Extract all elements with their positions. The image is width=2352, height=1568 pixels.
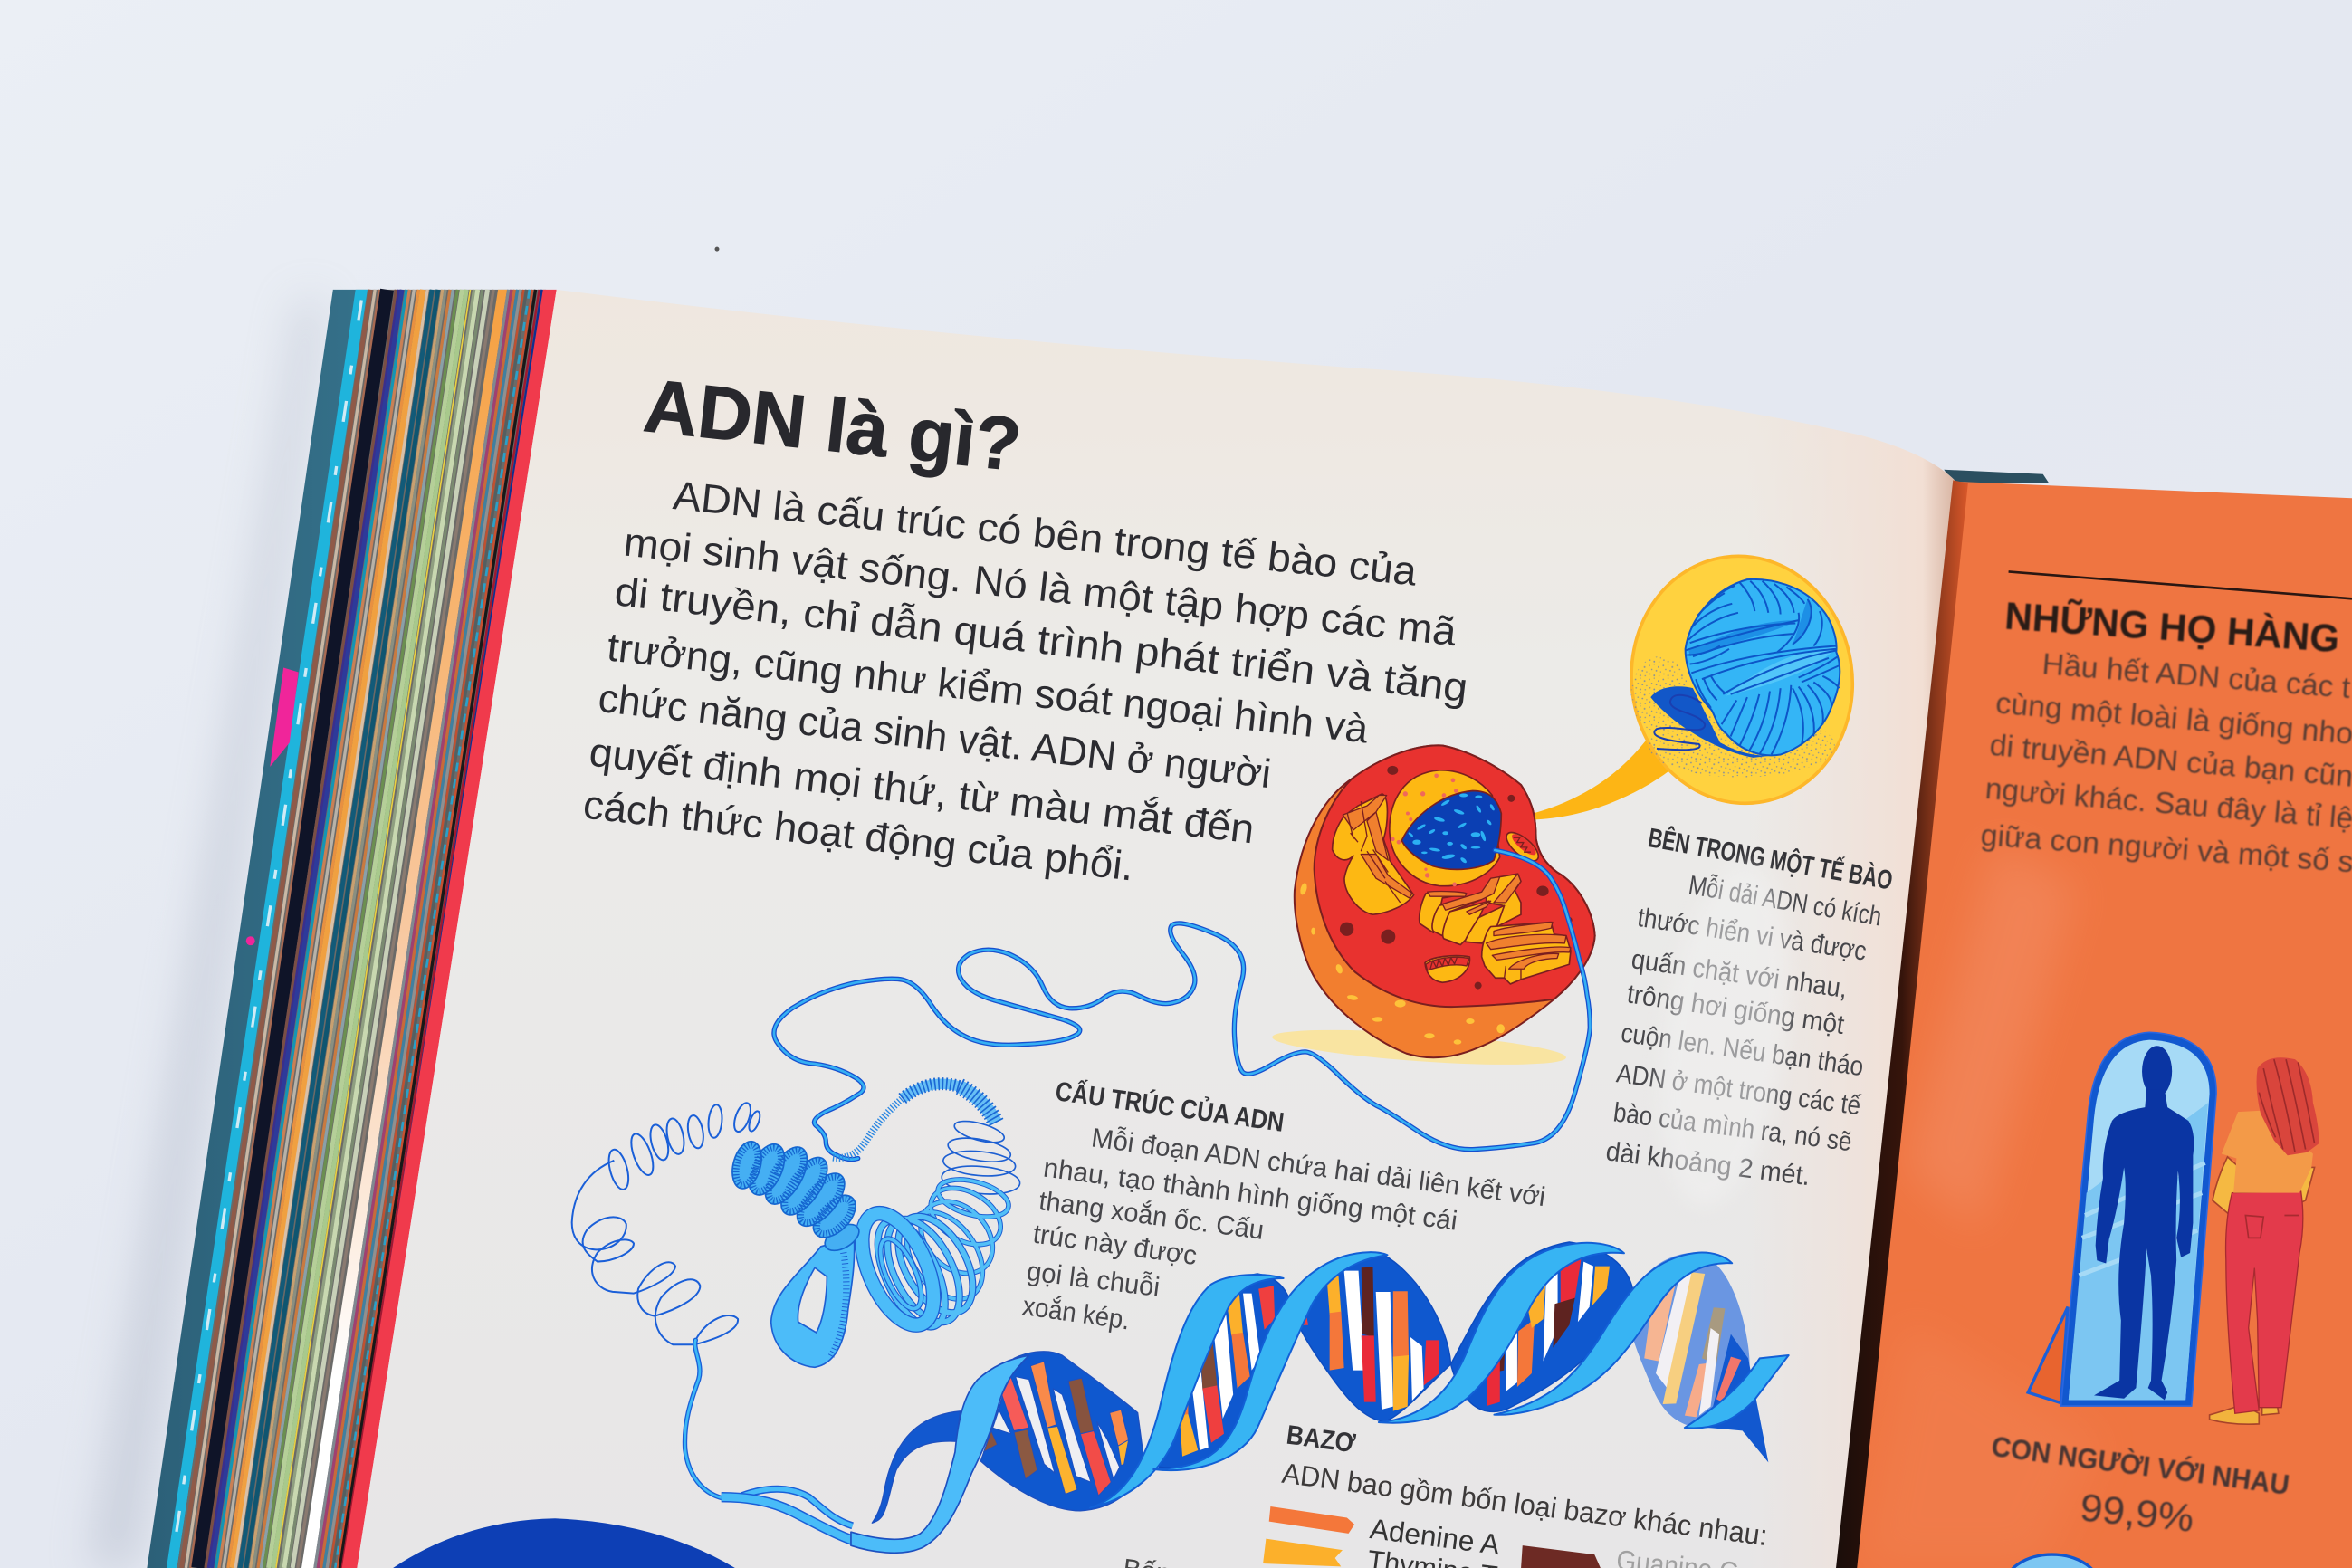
front ribbon one	[851, 1355, 1029, 1553]
icon: yarn ball callout	[1510, 541, 1869, 819]
organelle: centre golgi	[1420, 874, 1521, 945]
panel: book fore-edge with page stripes	[147, 290, 557, 1568]
text block: bases legend	[1121, 1420, 1769, 1568]
organelle: right golgi	[1482, 923, 1571, 984]
text block: relatives intro: Hầu hết ADN của các t	[2041, 647, 2352, 705]
figure: 99.9%: 99,9%	[2078, 1486, 2196, 1541]
illustration: mirror with human silhouette	[2028, 1032, 2216, 1406]
glare over cell caption	[1641, 856, 1809, 1215]
legend: adenine	[1269, 1506, 1502, 1561]
loose thread	[1654, 695, 1705, 750]
text block: structure of DNA: xoắn kép.	[1020, 1291, 1132, 1335]
backing bands	[1155, 1242, 1632, 1468]
heading: structure of DNA: CẤU TRÚC CỦA ADN	[1054, 1076, 1286, 1138]
illustration: unwinding DNA strand	[774, 850, 1590, 1160]
text block: inside a cell: Mỗi dải ADN có kích	[1687, 870, 1884, 932]
cell ground shadow	[1271, 1023, 1567, 1072]
text block: main intro paragraph: mọi sinh vật sống. Nó là một tập hợp các mã	[622, 519, 1458, 655]
heading: bases: BAZƠ	[1285, 1420, 1357, 1458]
yarn body	[1686, 579, 1840, 755]
illustration: animal cell	[1271, 745, 1595, 1072]
nucleus	[1390, 770, 1500, 886]
panel: back cover sliver at top of gutter	[1944, 470, 2049, 483]
silhouette	[2094, 1046, 2194, 1400]
label: humans to each other: CON NGƯỜI VỚI NHAU	[1990, 1429, 2291, 1501]
tail from spring to ribbon	[684, 1340, 724, 1498]
panel: left cream page	[357, 290, 1955, 1568]
text block: main intro paragraph	[581, 473, 1470, 889]
text block: main intro paragraph: di truyền, chỉ dẫn quá trình phát triển và tăng	[613, 569, 1470, 711]
text block: inside a cell: quấn chặt với nhau,	[1630, 944, 1850, 1004]
organelle: left golgi	[1333, 794, 1414, 914]
book shadow	[90, 300, 322, 1568]
text block: inside a cell: dài khoảng 2 mét.	[1604, 1136, 1812, 1191]
text block: main intro paragraph: chức năng của sinh vật. ADN ở người	[596, 675, 1273, 797]
illustration: DNA double helix	[851, 1242, 1789, 1553]
text block: inside a cell: cuộn len. Nếu bạn tháo	[1619, 1018, 1865, 1082]
illustration: coiled chromatin	[572, 1084, 1021, 1541]
text block: main intro paragraph: quyết định mọi thứ, từ màu mắt đến	[587, 730, 1257, 852]
text block: inside a cell: ADN ở một trong các tế	[1615, 1058, 1863, 1121]
text block: structure of DNA: nhau, tạo thành hình giống một cái	[1042, 1153, 1459, 1237]
text block: relatives intro: người khác. Sau đây là tỉ lệ	[1984, 772, 2352, 836]
text block: relatives intro: di truyền ADN của bạn cũn	[1988, 729, 2352, 794]
front ribbons	[1090, 1243, 1789, 1507]
heading: inside a cell: BÊN TRONG MỘT TẾ BÀO	[1646, 822, 1895, 896]
text block: structure of DNA: trúc này được	[1031, 1219, 1199, 1271]
text block: structure of DNA	[1020, 1076, 1547, 1335]
gutter shadow	[1836, 480, 1968, 1568]
title: ADN là gì?	[640, 363, 1025, 487]
text block: relatives intro: giữa con người và một số s	[1980, 818, 2352, 879]
blue shape at bottom of page	[393, 1518, 735, 1568]
open spring	[572, 1101, 762, 1344]
base pairs	[1175, 1254, 1741, 1457]
legend: thymine	[1263, 1539, 1499, 1568]
legend: guanine	[1521, 1544, 1741, 1568]
lower ribbon loop	[771, 1238, 855, 1367]
fine coil arc	[833, 1098, 903, 1158]
speck on backdrop	[715, 247, 719, 252]
ribbons running into helix	[742, 1489, 853, 1525]
bases intro: ADN bao gồm bốn loại bazơ khác nhau:	[1280, 1458, 1769, 1552]
wide rings	[941, 1117, 1021, 1197]
text block: inside a cell: trông hơi giống một	[1625, 979, 1847, 1040]
next illustration partly visible	[2004, 1554, 2100, 1568]
text block: structure of DNA: gọi là chuỗi	[1025, 1257, 1162, 1303]
remaining helix turns	[1090, 1242, 1789, 1507]
text block: inside a cell: bào của mình ra, nó sẽ	[1611, 1097, 1853, 1157]
text block: main intro paragraph: ADN là cấu trúc có bên trong tế bào của	[671, 473, 1419, 595]
text block: main intro paragraph: trưởng, cũng như kiểm soát ngoại hình và	[605, 624, 1371, 752]
thick ribbon loop	[847, 1203, 948, 1335]
text block: relatives intro: cùng một loài là giống nho	[1994, 686, 2352, 751]
rule above heading	[2009, 571, 2352, 598]
dense hatched cone	[728, 1138, 864, 1256]
legend: adenine: Adenine A	[1368, 1513, 1502, 1561]
text block: main intro paragraph: cách thức hoạt động của phổi.	[581, 782, 1136, 889]
first helix turn	[851, 1352, 1163, 1553]
heading: relatives: NHỮNG HỌ HÀNG	[2003, 594, 2341, 661]
text block: relatives intro	[1980, 647, 2352, 879]
callout disc	[1616, 541, 1869, 817]
text block: structure of DNA: thang xoắn ốc. Cấu	[1037, 1186, 1266, 1246]
text block: inside a cell: thước hiển vi và được	[1636, 903, 1869, 967]
text block: inside a cell	[1604, 822, 1895, 1191]
illustration: woman seen from behind	[2210, 1057, 2319, 1424]
page highlight streak	[1905, 840, 2078, 1230]
organelle: mitochondria	[1425, 956, 1469, 982]
callout pointer	[1510, 740, 1670, 819]
panel: right orange page	[1839, 482, 2352, 1568]
cell body	[1295, 745, 1595, 1057]
text block: structure of DNA: Mỗi đoạn ADN chứa hai dải liên kết với	[1090, 1123, 1547, 1212]
